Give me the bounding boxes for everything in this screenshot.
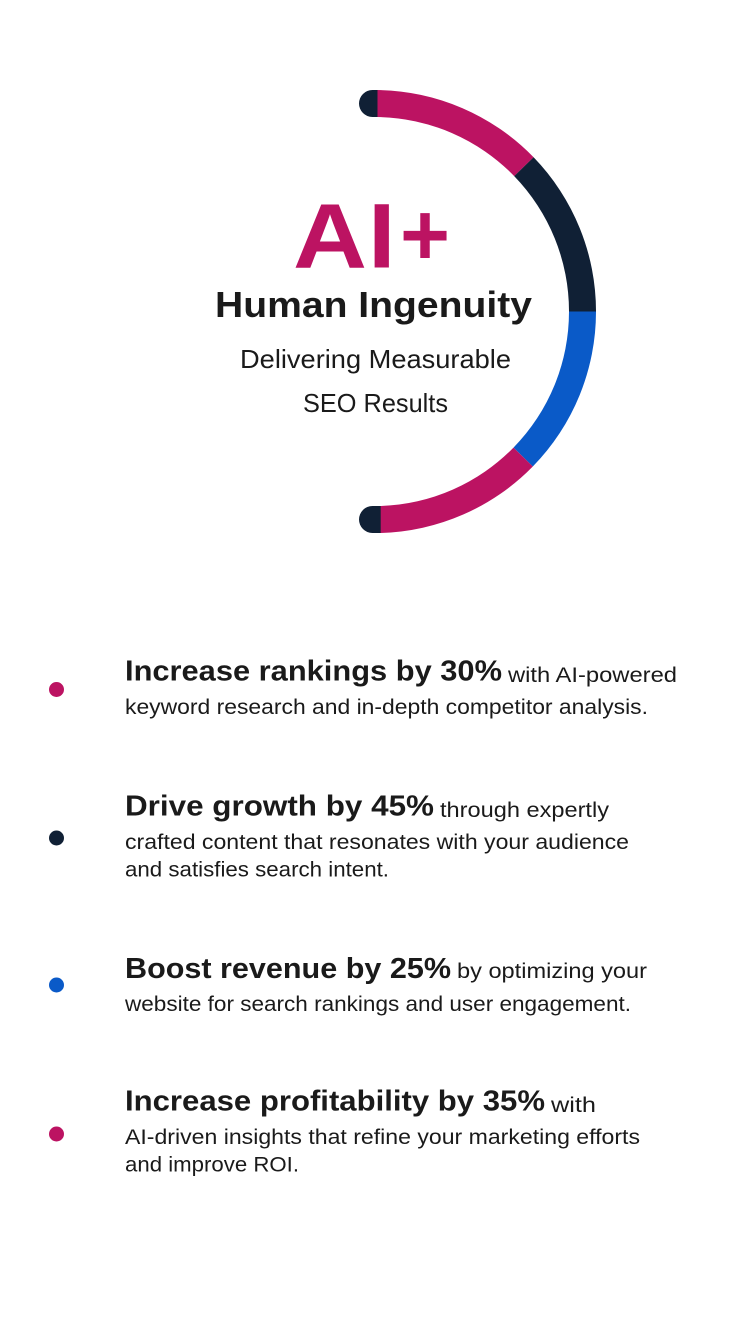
title: AI+: I xyxy=(368,186,396,288)
bullet: magenta xyxy=(49,1126,64,1142)
item 3 text: website for search rankings and user engagement. xyxy=(124,992,631,1016)
title: AI+: + xyxy=(400,185,450,284)
item 3 text xyxy=(124,953,647,1016)
title: AI+: A xyxy=(293,186,367,288)
item 4 text: AI-driven insights that refine your marketing efforts xyxy=(125,1125,640,1149)
heading: Human Ingenuity: Human Ingenuity xyxy=(215,284,532,325)
arc segment: navy xyxy=(514,157,596,312)
bullet: magenta xyxy=(49,682,64,697)
item 1 text xyxy=(125,656,677,719)
item 1 text: keyword research and in-depth competitor analysis. xyxy=(125,695,648,719)
title: AI+ xyxy=(293,185,450,288)
item 3 text: by optimizing your xyxy=(457,959,647,983)
subtitle xyxy=(240,344,511,418)
item 4 text: with xyxy=(550,1093,596,1117)
list item 1 xyxy=(49,656,677,719)
chart: segmented semicircle gauge xyxy=(359,90,596,533)
item 2 text: and satisfies search intent. xyxy=(125,858,389,882)
item 1 text: with AI-powered xyxy=(507,663,677,687)
item 1 text: Increase rankings by 30% xyxy=(125,656,502,688)
arc segment: blue xyxy=(514,312,596,466)
item 2 text: Drive growth by 45% xyxy=(125,790,434,822)
item 4 text: Increase profitability by 35% xyxy=(125,1086,545,1118)
item 2 text xyxy=(125,790,629,882)
arc cap: bottom navy xyxy=(359,506,381,533)
item 4 text xyxy=(125,1086,640,1176)
arc segment: magenta bottom xyxy=(381,448,533,533)
arc cap: top navy xyxy=(359,90,378,117)
bullet: navy xyxy=(49,830,64,846)
item 2 text: crafted content that resonates with your audience xyxy=(125,830,629,854)
bullet: blue xyxy=(49,978,64,992)
item 3 text: Boost revenue by 25% xyxy=(125,953,451,985)
subtitle: Delivering Measurable xyxy=(240,344,511,374)
arc segment: magenta top xyxy=(378,90,534,176)
item 4 text: and improve ROI. xyxy=(125,1152,299,1176)
list item 2 xyxy=(49,790,629,882)
item 2 text: through expertly xyxy=(440,798,609,822)
list item 4 xyxy=(49,1086,640,1176)
subtitle: SEO Results xyxy=(303,388,448,418)
list item 3 xyxy=(49,953,647,1016)
